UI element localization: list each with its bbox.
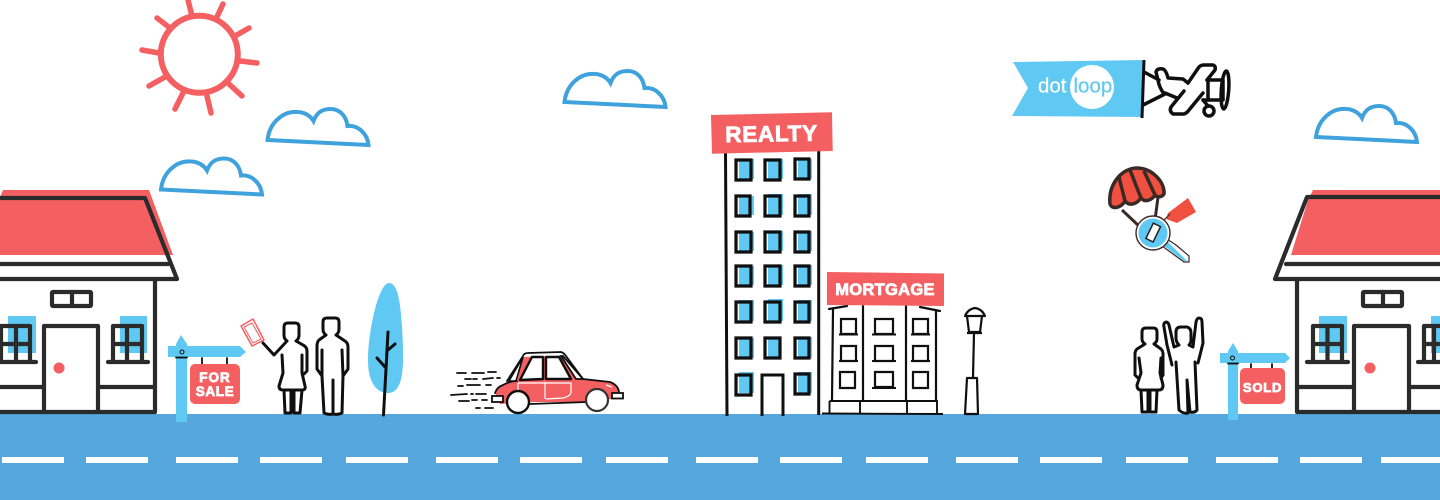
parachute strings: [1122, 197, 1158, 227]
banner pole: [1142, 60, 1144, 118]
upper wing: [1188, 65, 1215, 83]
post details: [176, 358, 227, 364]
cloud 4: [1316, 106, 1417, 142]
key head blue: [1138, 218, 1168, 248]
left house outline: [0, 198, 177, 412]
sold signpost: [1220, 343, 1290, 420]
mortgage sills: [839, 334, 930, 388]
tower window glass: [739, 159, 812, 393]
rear wheel: [507, 391, 529, 413]
propeller: [1220, 71, 1230, 109]
car red body: [495, 356, 619, 404]
for sale signpost: [168, 335, 246, 422]
tree foliage: [368, 283, 403, 393]
left house door knob: [54, 362, 64, 374]
mortgage sign board: [827, 272, 944, 306]
sale board: [190, 364, 240, 404]
car rear side glass: [509, 357, 523, 381]
key head: [1136, 216, 1170, 250]
left house attic divider: [70, 292, 74, 306]
canopy: [1110, 168, 1164, 208]
realty sign board: [711, 112, 833, 154]
right house window right: [1418, 326, 1440, 362]
road: [0, 414, 1440, 500]
woman with phone: [263, 323, 307, 413]
tower window frames: [736, 159, 809, 395]
mortgage walls: [829, 306, 940, 401]
right house roof: [1291, 190, 1440, 255]
lower wing: [1170, 91, 1203, 114]
right house outline: [1275, 197, 1440, 412]
street lamp: [965, 308, 985, 414]
sold post: [1220, 343, 1290, 420]
front wheel: [586, 389, 608, 411]
post bolt: [180, 350, 184, 354]
realty sign text: REALTY: [725, 121, 818, 147]
fuselage: [1156, 69, 1223, 100]
banner text loop: loop: [1074, 74, 1112, 98]
rear bumper: [492, 396, 503, 402]
sold post bolt: [1230, 356, 1234, 360]
tree trunk: [377, 332, 395, 415]
right house shutters: [1319, 316, 1440, 353]
mortgage sign text: MORTGAGE: [835, 281, 935, 299]
mortgage base: [822, 401, 943, 414]
for sale text: FOR: [199, 370, 231, 385]
banner flag: [1012, 60, 1144, 117]
right house door knob: [1364, 362, 1376, 374]
right house attic divider: [1381, 292, 1385, 306]
left house shutters: [8, 316, 147, 353]
front bumper: [612, 393, 623, 398]
key shaft: [1162, 238, 1189, 262]
mortgage windows: [840, 319, 928, 388]
sun: [142, 0, 257, 113]
right house attic window: [1363, 292, 1402, 306]
sold board: [1240, 368, 1285, 404]
cloud 3: [564, 71, 666, 107]
plane wheel: [1204, 106, 1214, 116]
dotloop plane banner: [1012, 60, 1230, 118]
key tag: [1166, 198, 1196, 223]
left house window left: [0, 326, 36, 362]
speed lines: [451, 372, 500, 408]
tower walls: [726, 150, 819, 416]
phone: [241, 319, 264, 346]
for sale text 2: SALE: [196, 384, 234, 399]
tree: [368, 283, 403, 415]
plane cockpit line: [1203, 80, 1208, 106]
car: [451, 352, 623, 413]
right house window left: [1307, 326, 1348, 362]
left house window right: [108, 326, 148, 362]
sold text: SOLD: [1243, 380, 1282, 395]
right house: [1275, 190, 1440, 412]
canopy ribs: [1119, 170, 1155, 201]
cloud 1: [268, 109, 368, 145]
car outline: [495, 352, 619, 404]
tow ropes: [1143, 72, 1165, 105]
key slot: [1146, 223, 1161, 242]
left house roof: [0, 190, 173, 255]
left house attic window: [52, 292, 91, 306]
tower door: [762, 375, 783, 416]
car white trim: [518, 382, 612, 399]
realty tower: [711, 112, 833, 416]
sold post details: [1228, 364, 1272, 368]
couple right: man waving: [1164, 318, 1203, 413]
mortgage building: [822, 272, 944, 414]
cloud 2: [161, 158, 262, 194]
left house: [0, 190, 177, 412]
couple right: woman: [1135, 328, 1163, 412]
banner circle: [1070, 65, 1114, 109]
tag string: [1160, 214, 1170, 226]
plane: [1143, 65, 1230, 116]
banner text dot: dot: [1038, 74, 1067, 98]
car front glass: [561, 356, 583, 379]
man: [317, 318, 348, 414]
parachuting key: [1110, 168, 1196, 262]
key blue stripe: [1164, 242, 1187, 261]
car windows: [520, 357, 571, 380]
signpost: [168, 335, 246, 422]
